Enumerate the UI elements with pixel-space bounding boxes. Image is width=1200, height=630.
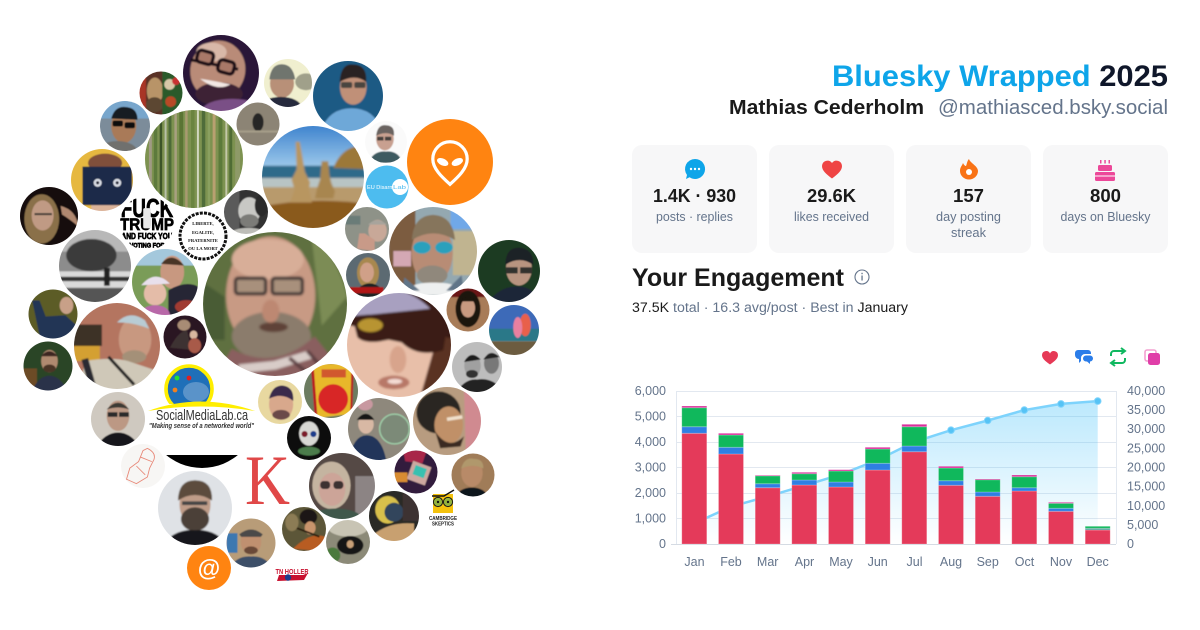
avatar: red serif K logo: K: [245, 442, 290, 520]
x axis month labels: Jan: [684, 555, 705, 569]
avatar: painting of flute player: [282, 507, 326, 551]
avatar: bearded man on cream background: [258, 380, 302, 424]
bar: February: [718, 433, 744, 544]
right y axis labels: 30,000: [1127, 422, 1165, 436]
avatar: man with thumb up: [345, 207, 389, 251]
cumulative points: [948, 398, 1101, 434]
avatar: Cambridge Skeptics logo: [429, 490, 458, 528]
bar: October: [1012, 475, 1037, 544]
right y axis labels: 15,000: [1127, 480, 1165, 494]
avatar: SocialMediaLab logo: SocialMediaLab.ca: [156, 407, 248, 424]
avatar: liberte seal: OU LA MORT: [188, 246, 218, 251]
avatar: protest slogan logo: [120, 198, 174, 248]
avatar: bearded man in garden: [24, 342, 72, 390]
x axis month labels: Mar: [757, 555, 778, 569]
stat card: day posting streak: day posting: [936, 210, 1001, 224]
avatar: close-up man with dark sunglasses: [347, 293, 451, 397]
bars: [682, 406, 1110, 544]
avatar: Klipp price poster: [304, 364, 358, 418]
stat card: likes received: [769, 145, 894, 253]
x axis month labels: Sep: [977, 555, 999, 569]
avatar: sugar skull: [287, 416, 331, 460]
avatar: liberte seal: [180, 213, 226, 259]
right y axis labels: 40,000: [1127, 384, 1165, 398]
avatar: man on blue background: [313, 61, 383, 131]
stat card: day posting streak: 157: [953, 185, 984, 206]
bar: November: [1048, 502, 1074, 544]
avatar: paper mask on yellow: [71, 149, 133, 211]
chart: monthly engagement stacked bars with cumulative line: [635, 384, 1165, 569]
avatar: woman news anchor: [346, 253, 390, 297]
bar: July: [902, 424, 927, 544]
x axis month labels: Nov: [1050, 555, 1073, 569]
icon: chat bubble: [685, 159, 705, 179]
avatar: SocialMediaLab logo: "Making sense of a networked world": [149, 421, 254, 430]
avatar: orange at-sign logo: @: [198, 555, 220, 581]
avatar: man in black shirt: [86, 387, 150, 451]
avatar: TN Holler logo: TN HOLLER: [276, 567, 309, 576]
avatar: split jungle portrait: [140, 72, 182, 114]
avatar: man with child: [132, 249, 198, 315]
right y axis labels: 10,000: [1127, 499, 1165, 513]
left y axis labels: 3,000: [635, 460, 666, 474]
avatar: green vertical stripes: [145, 110, 243, 208]
avatar: aviator sunglasses man: [389, 207, 477, 295]
user handle: @mathiasced.bsky.social: [938, 97, 1168, 119]
avatar: black and white boat photo: [59, 230, 131, 302]
avatar: man with cap by red wall: [65, 294, 169, 398]
icon: heart: [822, 161, 842, 178]
x axis month labels: Feb: [720, 555, 742, 569]
avatar: man with flat cap: [222, 514, 280, 572]
cumulative line: [694, 401, 1098, 523]
avatar: partially hidden black circle: [146, 356, 258, 468]
bar: April: [792, 472, 817, 544]
icon: reposts legend arrows: [1111, 348, 1125, 366]
stat card: days on Bluesky: days on Bluesky: [1060, 210, 1151, 224]
avatar: rock stacks on beach: [262, 126, 364, 228]
right y axis labels: 25,000: [1127, 442, 1165, 456]
icon: birthday cake: [1095, 160, 1115, 181]
avatar: person with baby in dark room: [159, 311, 211, 363]
avatar: dog on floor: [236, 102, 280, 146]
avatar: red line sketch: [117, 440, 169, 492]
avatar: orange at-sign logo: [187, 546, 231, 590]
left y axis labels: 2,000: [635, 486, 666, 500]
right y axis labels: 20,000: [1127, 460, 1165, 474]
legend icons: [1042, 348, 1160, 366]
avatar: person at seaside with pink float: [489, 305, 539, 355]
stat card: day posting streak: [906, 145, 1031, 253]
avatar: man with sunglasses and cap: [100, 101, 150, 151]
avatar: blonde woman: [20, 187, 78, 245]
right y axis labels: 5,000: [1127, 518, 1158, 532]
x axis month labels: May: [829, 555, 854, 569]
stat card: likes received: 29.6K: [807, 185, 857, 206]
right y axis labels: [1127, 384, 1165, 551]
avatar: pixel retro console: [394, 450, 438, 494]
panel: avatar cluster: [14, 27, 546, 590]
avatar: Cambridge Skeptics logo: CAMBRIDGE: [429, 516, 458, 522]
bar: March: [755, 475, 780, 544]
avatar: smiling man with glasses: [183, 35, 259, 111]
avatar: comic book woman: [369, 491, 419, 541]
avatar: liberte seal: FRATERNITE: [188, 238, 218, 243]
right y axis labels: 35,000: [1127, 403, 1165, 417]
avatar: orange alien logo: [407, 119, 493, 205]
avatar: large portrait man with glasses: [203, 232, 347, 376]
stat card: day posting streak: streak: [951, 226, 987, 240]
stat card: posts and replies: [632, 145, 757, 253]
left y axis labels: [635, 384, 666, 551]
avatar: Cambridge Skeptics logo: SKEPTICS: [432, 522, 455, 528]
stat card: posts and replies: 1.4K · 930: [653, 185, 736, 206]
icon: info: [855, 270, 869, 284]
stat card: days on Bluesky: 800: [1090, 185, 1121, 206]
avatar: grey-haired woman with glasses: [309, 453, 375, 519]
icon: quotes legend squares: [1145, 350, 1160, 365]
avatar: EU Disarm Lab logo: Lab: [393, 185, 406, 191]
avatar: TN Holler logo: [276, 567, 309, 581]
left y axis labels: 1,000: [635, 512, 666, 526]
stat card: likes received: likes received: [794, 210, 869, 224]
left y axis labels: 5,000: [635, 410, 666, 424]
title: Bluesky Wrapped 2025: [832, 60, 1168, 93]
avatar: blond man dark collar: [452, 454, 494, 496]
avatar: EU Disarm Lab logo: [366, 166, 408, 208]
x axis month labels: Aug: [940, 555, 962, 569]
bar: May: [828, 470, 854, 544]
left y axis labels: 6,000: [635, 384, 666, 398]
avatar: dark-haired man with glasses: [478, 240, 540, 302]
x axis month labels: Jun: [868, 555, 888, 569]
avatar: liberte seal: EGALITE,: [192, 230, 214, 235]
engagement summary: 37.5K total · 16.3 avg/post · Best in January: [632, 300, 908, 315]
x axis month labels: Apr: [795, 555, 814, 569]
icon: likes legend heart: [1042, 351, 1058, 364]
stat card: posts and replies: posts · replies: [656, 210, 733, 224]
avatar: SocialMediaLab logo: [145, 366, 255, 432]
bar: August: [938, 466, 964, 544]
x axis month labels: Jul: [907, 555, 922, 569]
icon: replies legend bubbles: [1075, 350, 1093, 364]
stat card: days on Bluesky: [1043, 145, 1168, 253]
left y axis labels: 4,000: [635, 435, 666, 449]
avatar: person in stone cave: [326, 520, 370, 564]
avatar: bearded man with glasses: [151, 464, 239, 552]
cumulative area: [694, 401, 1098, 544]
avatar: EU Disarm Lab logo: EU Disarm: [367, 185, 394, 191]
avatar: man with chalk drawing: [348, 398, 410, 460]
right y axis labels: 0: [1127, 537, 1134, 551]
avatar: two men black and white: [452, 342, 502, 392]
avatar: oil painting of bearded man: [413, 387, 481, 455]
bar: January: [682, 406, 707, 544]
bar: September: [975, 479, 1000, 544]
avatar: man in beanie: [264, 59, 312, 107]
x axis month labels: [684, 555, 1109, 569]
x axis month labels: Oct: [1015, 555, 1035, 569]
left y axis labels: 0: [659, 537, 666, 551]
avatar: smiling woman dark hair: [446, 288, 490, 332]
x axis month labels: Dec: [1087, 555, 1109, 569]
heading: Your Engagement: Your Engagement: [632, 264, 845, 292]
avatar: liberte seal: LIBERTE,: [192, 221, 214, 226]
user name: Mathias Cederholm: [729, 97, 924, 119]
icon: flame: [960, 159, 978, 180]
avatar: man in fleece with raised arm: [28, 290, 78, 338]
bar: December: [1085, 526, 1110, 544]
avatar: grey-haired man with glasses: [371, 124, 401, 163]
avatar: black and white bearded man: [224, 190, 268, 234]
bar: June: [865, 447, 890, 544]
